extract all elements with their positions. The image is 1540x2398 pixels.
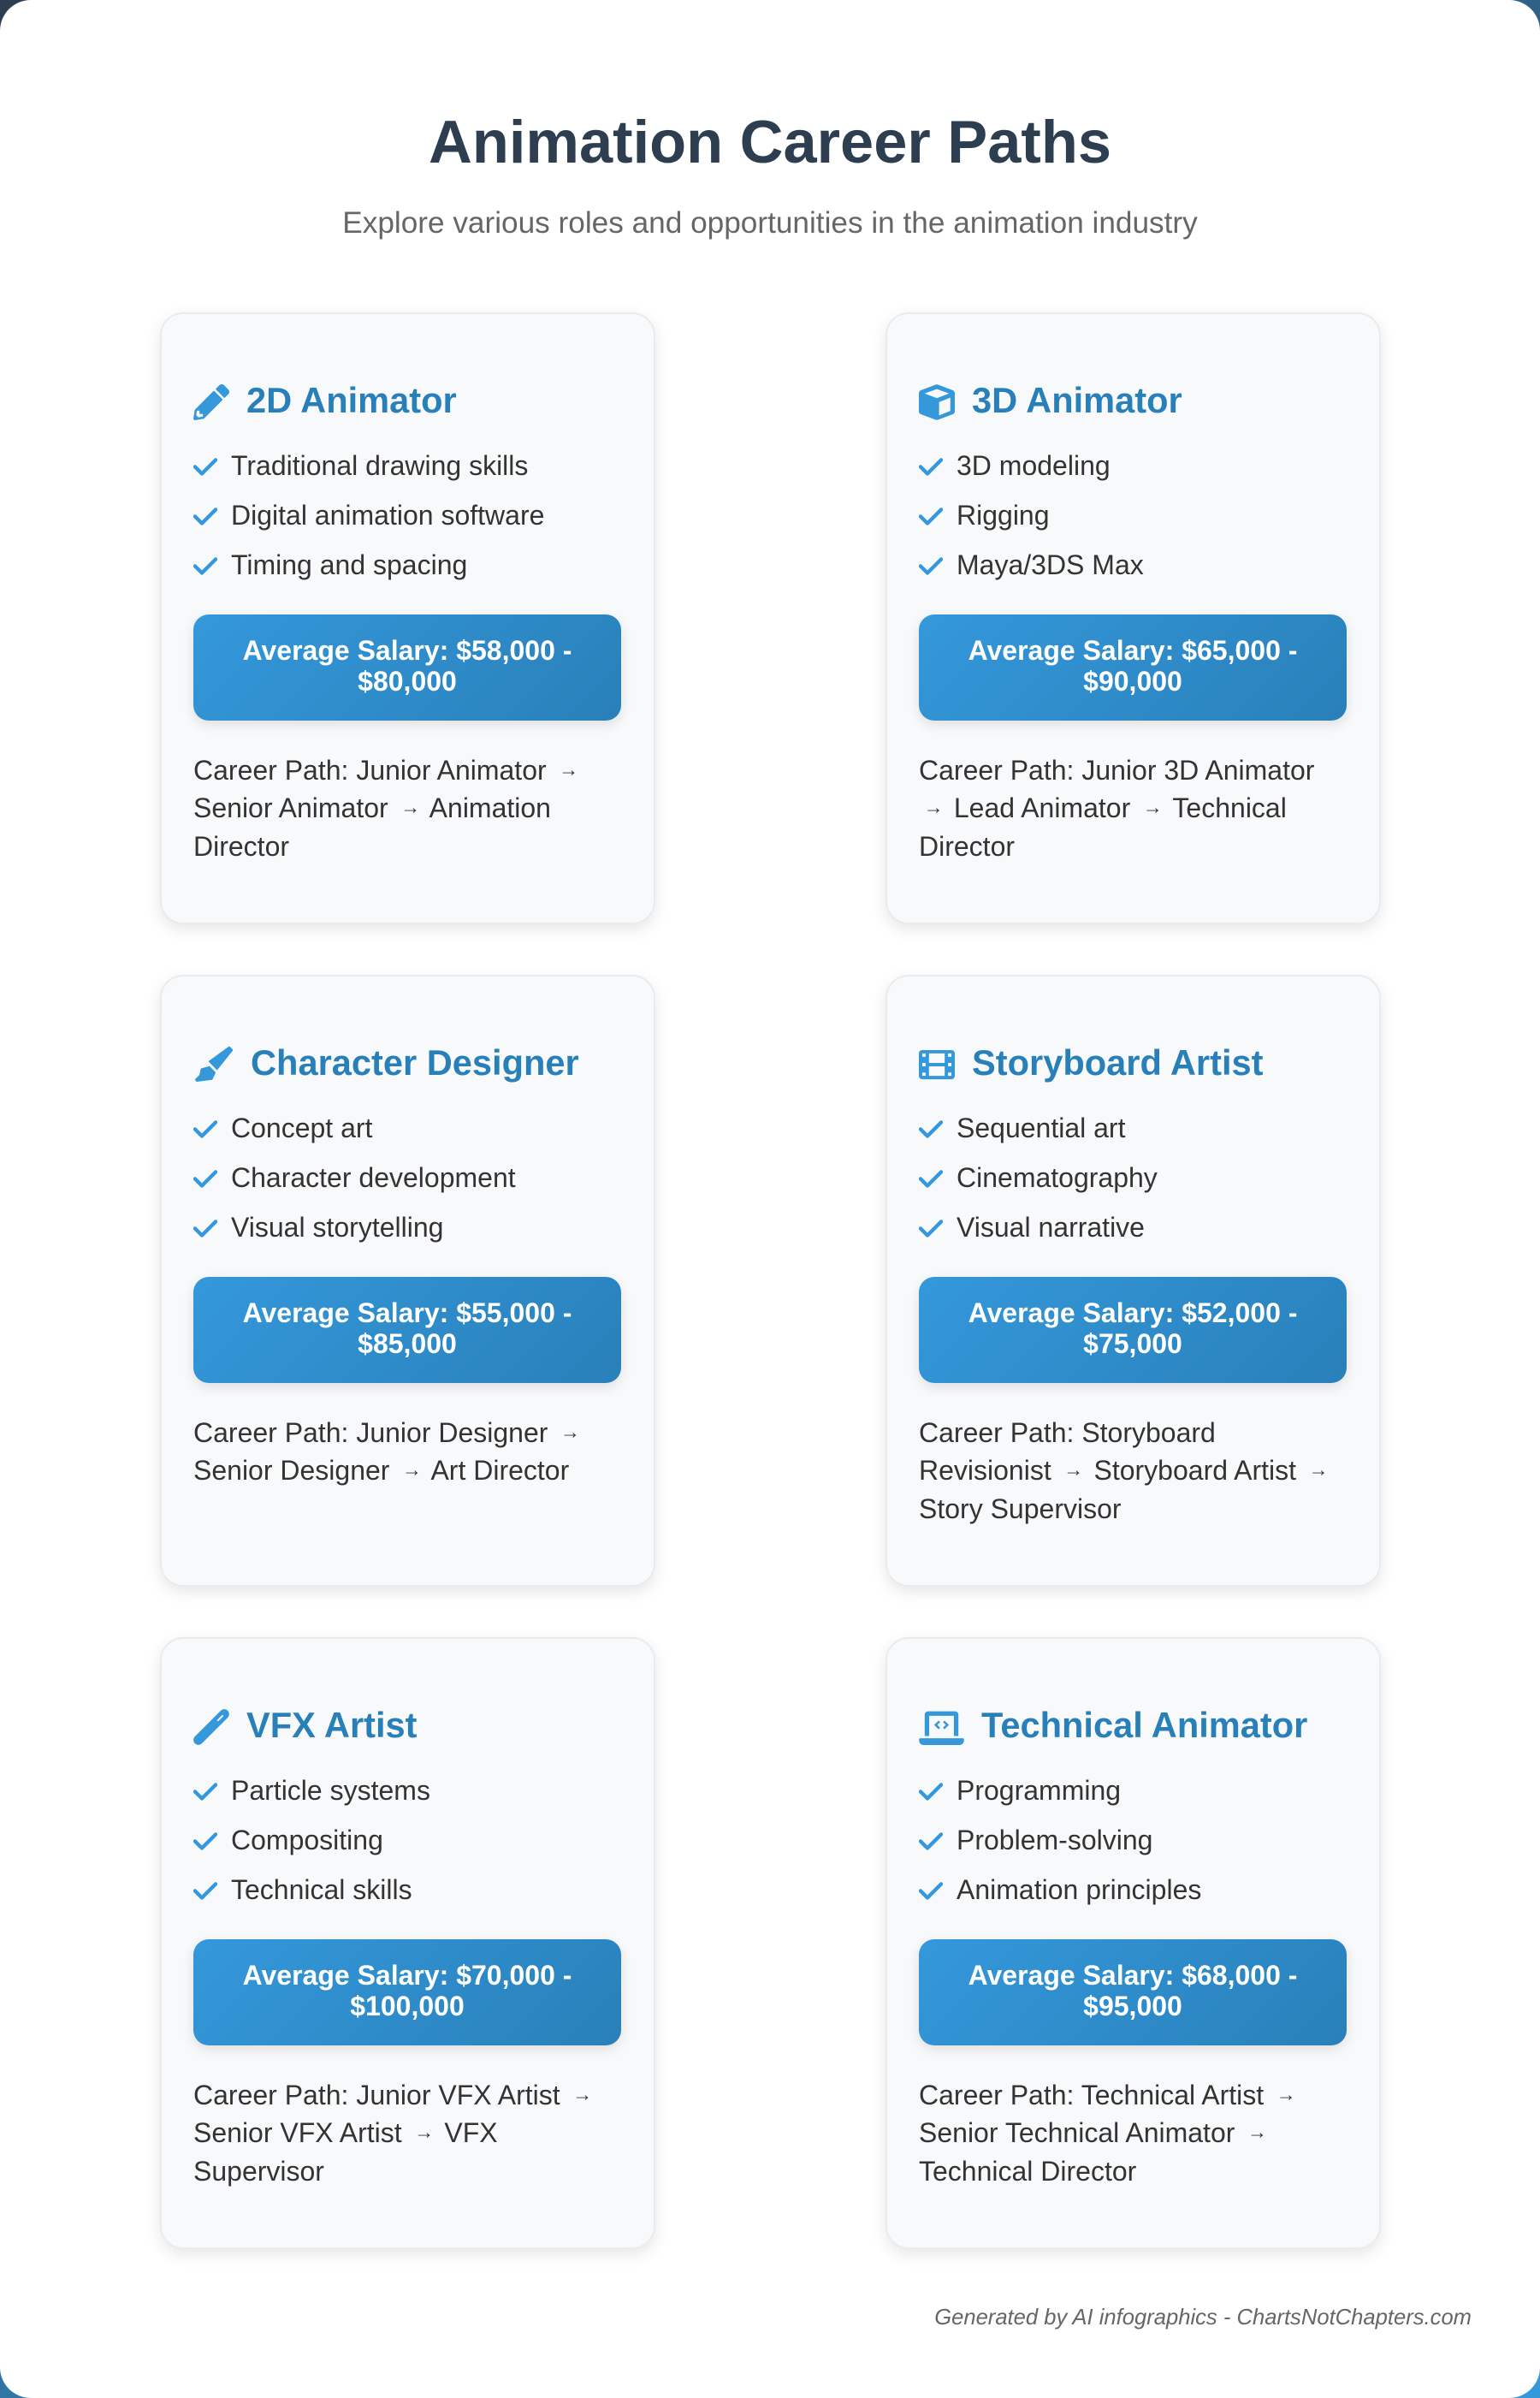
skills list: Sequential art bbox=[957, 1113, 1125, 1143]
skills list: Maya/3DS Max bbox=[957, 549, 1144, 580]
icon: laptop code bbox=[919, 1712, 964, 1745]
salary badge bbox=[919, 1277, 1347, 1383]
skills list bbox=[919, 1113, 1158, 1243]
heading: Character Designer bbox=[195, 1042, 579, 1082]
salary badge bbox=[193, 1277, 621, 1383]
skills list: Particle systems bbox=[231, 1775, 430, 1806]
career path bbox=[919, 755, 1314, 862]
panel: VFX Artist bbox=[159, 1636, 655, 2249]
career path: Technical Director bbox=[919, 2156, 1136, 2187]
career path: Senior Designer → Art Director bbox=[193, 1455, 569, 1486]
panel: Storyboard Artist bbox=[885, 974, 1381, 1587]
skills list bbox=[919, 1775, 1201, 1905]
title: Animation Career Paths bbox=[429, 108, 1111, 175]
salary badge: Average Salary: $52,000 - bbox=[968, 1297, 1297, 1328]
career path bbox=[919, 2080, 1296, 2187]
career path: Revisionist → Storyboard Artist → bbox=[919, 1455, 1329, 1486]
icon: paint brush bbox=[195, 1046, 233, 1082]
skills list bbox=[193, 1113, 516, 1243]
salary badge: $80,000 bbox=[358, 666, 457, 697]
career path: Career Path: Junior Animator → bbox=[193, 755, 578, 786]
skills list: Character development bbox=[231, 1162, 516, 1193]
career path: Senior VFX Artist → VFX bbox=[193, 2117, 498, 2148]
skills list bbox=[919, 450, 1144, 580]
salary badge: $90,000 bbox=[1083, 666, 1182, 697]
icon: cube bbox=[919, 384, 955, 420]
career path: Career Path: Junior Designer → bbox=[193, 1417, 580, 1448]
career path: Story Supervisor bbox=[919, 1493, 1122, 1524]
salary badge: Average Salary: $55,000 - bbox=[243, 1297, 572, 1328]
career path bbox=[193, 1417, 580, 1486]
icon: wand bbox=[193, 1709, 229, 1745]
icon: film strip bbox=[919, 1050, 955, 1080]
panel: 2D Animator: 2D Animator bbox=[246, 380, 457, 419]
skills list: Cinematography bbox=[957, 1162, 1158, 1193]
career path bbox=[193, 2080, 592, 2187]
salary badge bbox=[919, 614, 1347, 721]
salary badge: Average Salary: $70,000 - bbox=[243, 1960, 572, 1991]
salary badge: $100,000 bbox=[350, 1991, 465, 2021]
heading: 2D Animator bbox=[193, 380, 457, 420]
skills list: Traditional drawing skills bbox=[231, 450, 528, 481]
skills list: Technical skills bbox=[231, 1874, 412, 1905]
skills list: Visual narrative bbox=[957, 1212, 1145, 1243]
subtitle: Explore various roles and opportunities in the animation industry bbox=[342, 205, 1198, 240]
career path bbox=[919, 1417, 1329, 1524]
career path: Director bbox=[193, 831, 289, 862]
heading: 3D Animator bbox=[919, 380, 1182, 420]
skills list: Visual storytelling bbox=[231, 1212, 443, 1243]
career path: Career Path: Technical Artist → bbox=[919, 2080, 1296, 2110]
salary badge: $75,000 bbox=[1083, 1328, 1182, 1359]
career path bbox=[193, 755, 578, 862]
heading: Storyboard Artist bbox=[919, 1042, 1263, 1082]
panel: Technical Animator: Technical Animator bbox=[981, 1705, 1307, 1744]
skills list: Animation principles bbox=[957, 1874, 1201, 1905]
panel: Character Designer bbox=[159, 974, 655, 1587]
skills list: Problem-solving bbox=[957, 1825, 1152, 1855]
panel: VFX Artist: VFX Artist bbox=[246, 1705, 418, 1744]
salary badge: Average Salary: $58,000 - bbox=[243, 635, 572, 666]
heading: Technical Animator bbox=[919, 1705, 1307, 1745]
panel: 3D Animator bbox=[885, 312, 1381, 924]
salary badge: Average Salary: $65,000 - bbox=[968, 635, 1297, 666]
panel: Storyboard Artist: Storyboard Artist bbox=[972, 1042, 1263, 1082]
salary badge bbox=[193, 614, 621, 721]
salary badge bbox=[193, 1939, 621, 2045]
career path: Supervisor bbox=[193, 2156, 324, 2187]
skills list bbox=[193, 1775, 430, 1905]
heading: VFX Artist bbox=[193, 1705, 418, 1745]
career path: → Lead Animator → Technical bbox=[924, 792, 1287, 823]
career path: Career Path: Storyboard bbox=[919, 1417, 1216, 1448]
panel: 3D Animator: 3D Animator bbox=[972, 380, 1182, 419]
skills list: Rigging bbox=[957, 500, 1050, 531]
panel: Character Designer: Character Designer bbox=[251, 1042, 579, 1082]
salary badge: $85,000 bbox=[358, 1328, 457, 1359]
panel: 2D Animator bbox=[159, 312, 655, 924]
career path: Senior Animator → Animation bbox=[193, 792, 551, 823]
skills list: Compositing bbox=[231, 1825, 383, 1855]
footer credit: Generated by AI infographics - ChartsNotChapters.com bbox=[934, 2306, 1472, 2330]
career path: Director bbox=[919, 831, 1015, 862]
career path: Career Path: Junior VFX Artist → bbox=[193, 2080, 592, 2110]
panel: Technical Animator bbox=[885, 1636, 1381, 2249]
salary badge bbox=[919, 1939, 1347, 2045]
skills list: Digital animation software bbox=[231, 500, 544, 531]
career path: Career Path: Junior 3D Animator bbox=[919, 755, 1314, 786]
skills list: Programming bbox=[957, 1775, 1121, 1806]
skills list: Concept art bbox=[231, 1113, 372, 1143]
icon: pencil bbox=[193, 384, 229, 420]
skills list: 3D modeling bbox=[957, 450, 1111, 481]
salary badge: Average Salary: $68,000 - bbox=[968, 1960, 1297, 1991]
salary badge: $95,000 bbox=[1083, 1991, 1182, 2021]
skills list bbox=[193, 450, 544, 580]
skills list: Timing and spacing bbox=[231, 549, 467, 580]
career path: Senior Technical Animator → bbox=[919, 2117, 1267, 2148]
